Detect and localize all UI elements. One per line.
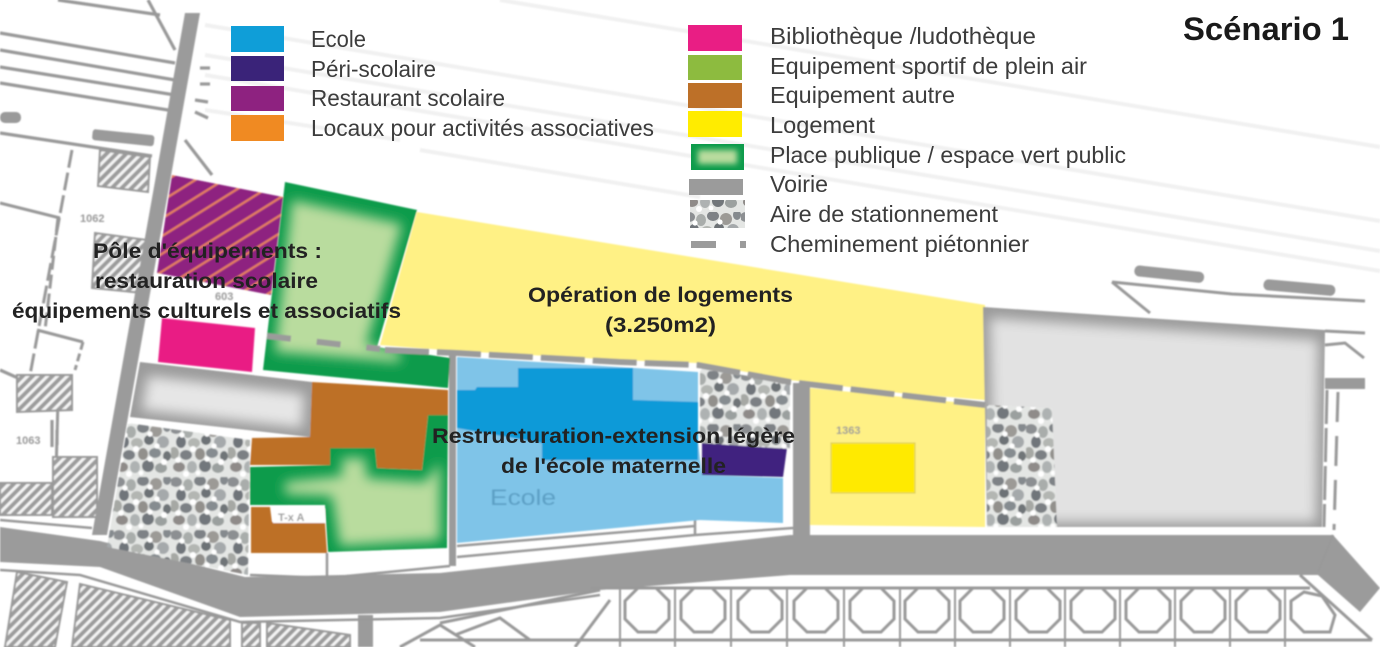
swatch: cheminement bbox=[691, 241, 746, 248]
legend: left column bbox=[231, 26, 654, 141]
cadastral numbers: 1363 bbox=[836, 425, 860, 437]
label: bibliotheque: Bibliothèque /ludothèque bbox=[770, 23, 1036, 49]
swatch: equipement autre bbox=[688, 83, 742, 108]
callout: ecole maternelle: de l'école maternelle bbox=[501, 454, 726, 478]
map: parking east bbox=[987, 405, 1057, 527]
swatch: place publique bbox=[691, 144, 744, 170]
label: place publique: Place publique / espace vert public bbox=[770, 142, 1126, 168]
cadastral numbers: 1063 bbox=[16, 435, 40, 447]
legend: right column bbox=[688, 23, 1126, 257]
octagonal courtyards bbox=[400, 575, 1372, 647]
map: restaurant scolaire plot bbox=[157, 175, 283, 295]
swatch: sport bbox=[688, 55, 742, 80]
map: small parcel label: T-x A bbox=[278, 512, 305, 524]
side roads bbox=[358, 352, 810, 647]
callout: ecole maternelle: Restructuration-extension légère bbox=[432, 424, 795, 448]
cadastral numbers bbox=[16, 213, 860, 447]
map: large road area bbox=[975, 300, 1335, 535]
label: equipement autre: Equipement autre bbox=[770, 82, 955, 108]
swatch: ecole bbox=[231, 26, 284, 52]
map: public green space north bbox=[262, 181, 451, 389]
callout: pole d'equipements: restauration scolaire bbox=[95, 269, 318, 293]
label: cheminement: Cheminement piétonnier bbox=[770, 231, 1029, 257]
pedestrian path bbox=[267, 336, 985, 405]
parcel lines bbox=[30, 150, 1365, 530]
callout: operation de logements: Opération de logements bbox=[528, 283, 793, 307]
swatch: voirie bbox=[689, 179, 743, 195]
map: school lot name: Ecole bbox=[490, 485, 556, 510]
map: school grounds bbox=[457, 357, 783, 543]
faint railway lines bbox=[205, 0, 1380, 271]
label: sport: Equipement sportif de plein air bbox=[770, 53, 1087, 79]
left vertical road bbox=[92, 13, 200, 535]
label: peri-scolaire: Péri-scolaire bbox=[311, 56, 436, 82]
label: logement: Logement bbox=[770, 112, 876, 138]
label: restaurant scolaire: Restaurant scolaire bbox=[311, 85, 505, 111]
map: small parcel label bbox=[273, 509, 325, 524]
map blobs bbox=[0, 112, 1365, 389]
swatch: restaurant scolaire bbox=[231, 86, 284, 111]
map: small road area bbox=[129, 361, 313, 438]
cadastral numbers: 603 bbox=[215, 291, 233, 303]
swatch: locaux associatifs bbox=[231, 115, 284, 141]
label: locaux associatifs: Locaux pour activités associatives bbox=[311, 115, 654, 141]
hatched buildings bbox=[0, 150, 350, 647]
callout: pole d'equipements: équipements culturels et associatifs bbox=[12, 299, 401, 323]
map: peri-scolaire bbox=[702, 442, 787, 477]
map: housing building bbox=[831, 443, 915, 493]
parcels below plots bbox=[0, 478, 1333, 622]
map: parking west bbox=[107, 423, 250, 575]
map: other equipment north bbox=[250, 382, 448, 470]
map: library bbox=[158, 318, 255, 372]
swatch: bibliotheque bbox=[688, 25, 742, 51]
swatch: logement bbox=[688, 111, 742, 137]
callout: operation de logements bbox=[528, 283, 793, 337]
map: housing operation plot bbox=[380, 212, 985, 400]
map: other equipment south bbox=[251, 507, 327, 553]
map: school buildings bbox=[457, 368, 698, 460]
map: housing east plot bbox=[810, 388, 985, 527]
label: ecole: Ecole bbox=[311, 26, 366, 52]
label: voirie: Voirie bbox=[770, 171, 828, 197]
map: public green space south bbox=[249, 414, 449, 553]
railway tracks left bbox=[0, 0, 212, 447]
callout: ecole maternelle bbox=[432, 424, 795, 478]
label: stationnement: Aire de stationnement bbox=[770, 201, 999, 227]
map: parking north bbox=[700, 368, 790, 449]
callout: pole d'equipements: Pôle d'équipements : bbox=[93, 239, 322, 263]
cadastral numbers: 1062 bbox=[80, 213, 104, 225]
callout: pole d'equipements bbox=[12, 239, 401, 323]
callout: operation de logements: (3.250m2) bbox=[605, 313, 716, 337]
swatch: peri-scolaire bbox=[231, 56, 284, 81]
main road bbox=[0, 527, 1380, 617]
swatch: stationnement bbox=[690, 200, 745, 228]
title: Scénario 1 bbox=[1183, 11, 1349, 47]
